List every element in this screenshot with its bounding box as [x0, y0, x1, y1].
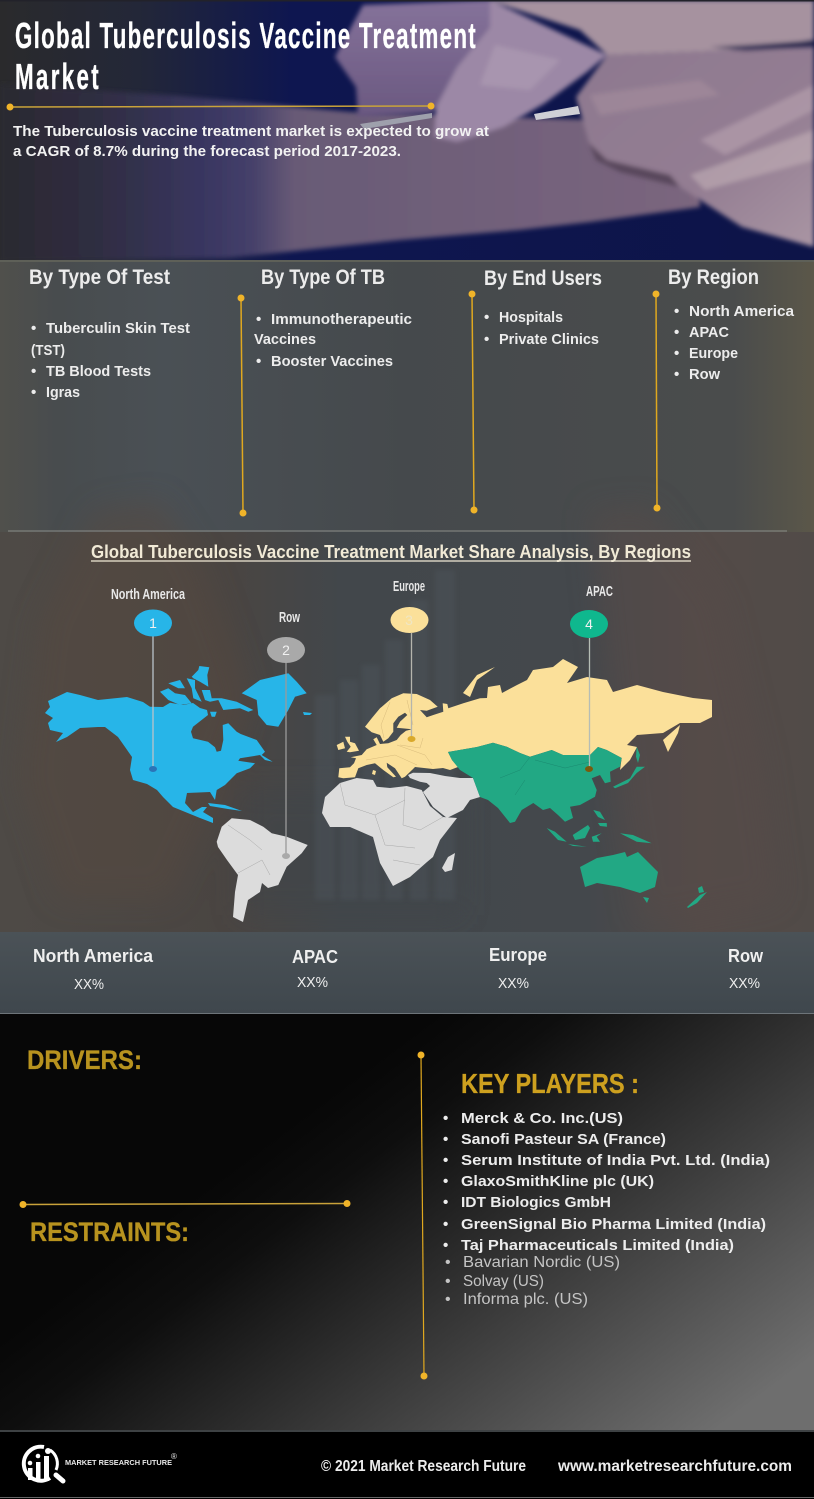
key players list: Informa plc. (US) [463, 1291, 588, 1308]
key players list [443, 1110, 770, 1308]
map heading: Global Tuberculosis Vaccine Treatment Market Share Analysis, By Regions [91, 542, 691, 562]
key players list: • [443, 1152, 448, 1169]
key players list: • [445, 1273, 451, 1290]
pin: north america [111, 586, 185, 772]
panel: by type of tb: • [256, 311, 261, 328]
syringe [360, 106, 580, 129]
panel: by type of tb: Vaccines [254, 331, 316, 348]
pin: apac [570, 583, 613, 772]
segmentation and map background [0, 260, 814, 932]
stat: north america: North America [33, 946, 154, 966]
key players list: Sanofi Pasteur SA (France) [461, 1131, 666, 1148]
pin: europe: Europe [393, 578, 425, 595]
stat: north america: XX% [74, 976, 104, 993]
heading: drivers: DRIVERS: [27, 1045, 142, 1075]
divider: test to tb [238, 294, 246, 516]
world map [45, 659, 712, 922]
footer [0, 1430, 814, 1499]
title [15, 17, 476, 97]
pin: north america: North America [111, 586, 185, 603]
hero photo panel [0, 0, 814, 262]
key players list: • [445, 1254, 451, 1271]
key players list: • [443, 1194, 448, 1211]
pin: europe [390, 578, 428, 742]
vertical rule [418, 1052, 428, 1380]
region: apac [448, 743, 707, 908]
heading: by type of tb: By Type Of TB [261, 266, 385, 289]
divider: end users to region [652, 290, 660, 512]
title rule [6, 102, 434, 110]
arm [0, 84, 700, 262]
panel: by type of test: • [31, 363, 36, 380]
title: Market [15, 58, 99, 97]
key players list: • [443, 1131, 448, 1148]
stat: apac: XX% [297, 974, 328, 991]
logo: ® [171, 1452, 177, 1461]
panel: by type of test: TB Blood Tests [46, 363, 151, 380]
heading: key players: KEY PLAYERS : [461, 1068, 639, 1099]
intro text: The Tuberculosis vaccine treatment market is expected to grow at [13, 123, 489, 140]
panel: by type of tb: • [256, 353, 261, 370]
panel: by region: North America [689, 303, 795, 320]
divider: tb to end users [468, 290, 478, 514]
panel: by end users [484, 267, 602, 348]
panel: by region: APAC [689, 324, 729, 341]
heading: by type of test: By Type Of Test [29, 266, 170, 289]
key players list: • [443, 1216, 448, 1233]
pin: row: 2 [282, 642, 290, 658]
pin: north america: 1 [149, 615, 157, 631]
stat: row [728, 946, 764, 992]
panel: drivers restraints key players [0, 1013, 814, 1430]
heading: by region: By Region [668, 266, 759, 289]
panel: by type of tb: Immunotherapeutic [271, 311, 412, 328]
heading: restraints: RESTRAINTS: [30, 1217, 189, 1247]
key players list: • [445, 1291, 451, 1308]
pin: row: Row [279, 609, 300, 626]
stat: row: XX% [729, 975, 760, 992]
panel: by type of test: Tuberculin Skin Test [46, 320, 190, 337]
stat: europe: Europe [489, 945, 547, 965]
key players list: IDT Biologics GmbH [461, 1194, 611, 1211]
key players list: • [443, 1173, 448, 1190]
panel: by region: • [674, 366, 679, 383]
key players list: GreenSignal Bio Pharma Limited (India) [461, 1216, 766, 1233]
key players list: GlaxoSmithKline plc (UK) [461, 1173, 654, 1190]
key players list: Bavarian Nordic (US) [463, 1254, 620, 1271]
heading: by end users: By End Users [484, 267, 602, 290]
region: rest of world [217, 773, 480, 922]
key players list: Solvay (US) [463, 1273, 544, 1290]
stat: apac: APAC [292, 947, 338, 967]
intro text: a CAGR of 8.7% during the forecast period 2017-2023. [13, 143, 401, 160]
copyright: © 2021 Market Research Future [321, 1458, 526, 1475]
logo: MARKET RESEARCH FUTURE [65, 1460, 172, 1467]
panel: by region: • [674, 303, 679, 320]
key players list: Merck & Co. Inc.(US) [461, 1110, 623, 1127]
key players list: • [443, 1237, 448, 1254]
panel: by type of tb: Booster Vaccines [271, 353, 393, 370]
panel: by type of test: (TST) [31, 342, 65, 359]
panel: by end users: • [484, 309, 489, 326]
pin: apac: APAC [586, 583, 613, 600]
panel: by type of test: Igras [46, 384, 80, 401]
panel: by region: Row [689, 366, 720, 383]
panel: by type of tb [254, 266, 412, 370]
panel: by region: • [674, 324, 679, 341]
logo [24, 1447, 177, 1481]
gloved hands [335, 0, 814, 247]
panel: regional shares [0, 932, 814, 1013]
key players list: Serum Institute of India Pvt. Ltd. (India) [461, 1152, 770, 1169]
rule between drivers and restraints [20, 1200, 350, 1208]
stat: europe: XX% [498, 975, 529, 992]
stat: row: Row [728, 946, 764, 966]
panel: by type of test: • [31, 384, 36, 401]
region: north america [45, 666, 312, 823]
pin: apac: 4 [585, 616, 593, 632]
stat: europe [489, 945, 547, 992]
intro text [13, 123, 489, 160]
stat: apac [292, 947, 338, 991]
key players list: • [443, 1110, 448, 1127]
pin: europe: 3 [405, 612, 413, 628]
panel: by region: • [674, 345, 679, 362]
panel: by end users: • [484, 331, 489, 348]
website: www.marketresearchfuture.com [557, 1458, 792, 1475]
stat: north america [33, 946, 154, 993]
panel: by region: Europe [689, 345, 738, 362]
panel: by end users: Private Clinics [499, 331, 599, 348]
pin: row [267, 609, 305, 859]
title: Global Tuberculosis Vaccine Treatment [15, 17, 476, 56]
region: europe and russia [337, 659, 712, 778]
panel: by region [668, 266, 795, 383]
panel: by type of test: • [31, 320, 36, 337]
key players list: Taj Pharmaceuticals Limited (India) [461, 1237, 734, 1254]
panel: by end users: Hospitals [499, 309, 563, 326]
panel: by type of test [29, 266, 190, 401]
